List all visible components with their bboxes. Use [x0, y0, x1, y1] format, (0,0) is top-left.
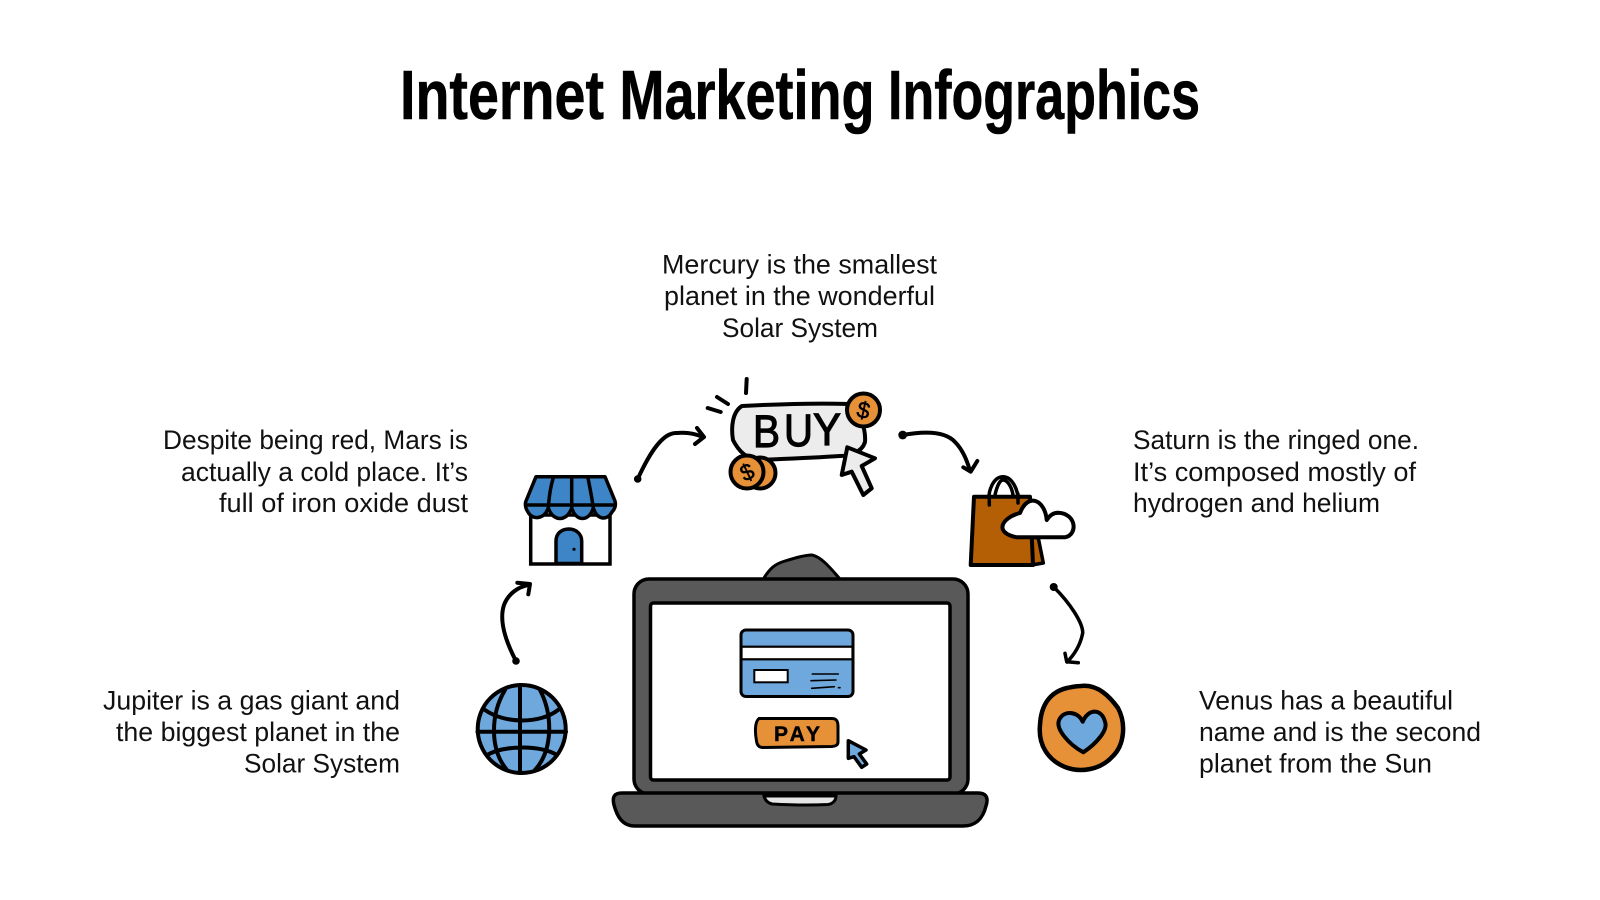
text: Mars: actually a cold place. It’s: [181, 457, 468, 487]
text: Mars: full of iron oxide dust: [219, 488, 469, 518]
text: Venus: planet from the Sun: [1199, 748, 1432, 778]
pay cursor: [848, 741, 867, 767]
icon: buy button: $: [736, 457, 758, 486]
laptop base: [613, 793, 987, 826]
text: Mercury: Mercury is the smallest: [662, 250, 938, 280]
icon: buy button: Y: [813, 404, 841, 455]
text: Jupiter: Jupiter is a gas giant and: [103, 686, 400, 716]
text: Saturn: hydrogen and helium: [1133, 488, 1380, 518]
icon: buy button: $: [855, 396, 873, 424]
icon: heart badge: [1040, 686, 1123, 770]
arrow: shop to buy: [634, 428, 704, 483]
text: Venus: name and is the second: [1199, 717, 1481, 747]
icon: laptop: [613, 555, 987, 826]
text: Mars: [163, 425, 469, 518]
icon: buy button: [708, 379, 880, 495]
title: Infographics: [888, 56, 1200, 134]
camera bump: [763, 555, 840, 579]
text: Saturn: [1133, 425, 1419, 518]
laptop screen: [650, 603, 950, 780]
text: Jupiter: the biggest planet in the: [116, 717, 400, 747]
text: Saturn: Saturn is the ringed one.: [1133, 425, 1419, 455]
title: Marketing: [620, 56, 874, 134]
laptop lid: [634, 579, 968, 794]
icon: globe: [478, 685, 566, 773]
pay button: [755, 718, 838, 748]
text: Saturn: It’s composed mostly of: [1133, 457, 1417, 487]
text: Venus: Venus has a beautiful: [1199, 686, 1453, 716]
text: Mercury: planet in the wonderful: [664, 281, 935, 311]
pay button: PAY: [774, 723, 820, 746]
arrow: buy to bag: [898, 431, 977, 472]
icon: shop: [525, 477, 615, 564]
credit card: [741, 630, 853, 696]
title: Internet: [400, 56, 604, 134]
icon: buy button: U: [784, 405, 813, 456]
icon: bag with cloud: [971, 477, 1074, 565]
text: Jupiter: [103, 686, 400, 778]
text: Venus: [1199, 686, 1481, 778]
text: Mercury: Solar System: [722, 313, 878, 343]
laptop notch: [764, 796, 836, 805]
text: Mercury: [662, 250, 938, 343]
arrow: globe to shop: [502, 583, 530, 665]
text: Mars: Despite being red, Mars is: [163, 425, 468, 455]
title: [400, 56, 1200, 134]
arrow: bag to heart: [1050, 583, 1083, 663]
icon: buy button: B: [753, 406, 780, 457]
text: Jupiter: Solar System: [244, 748, 400, 778]
